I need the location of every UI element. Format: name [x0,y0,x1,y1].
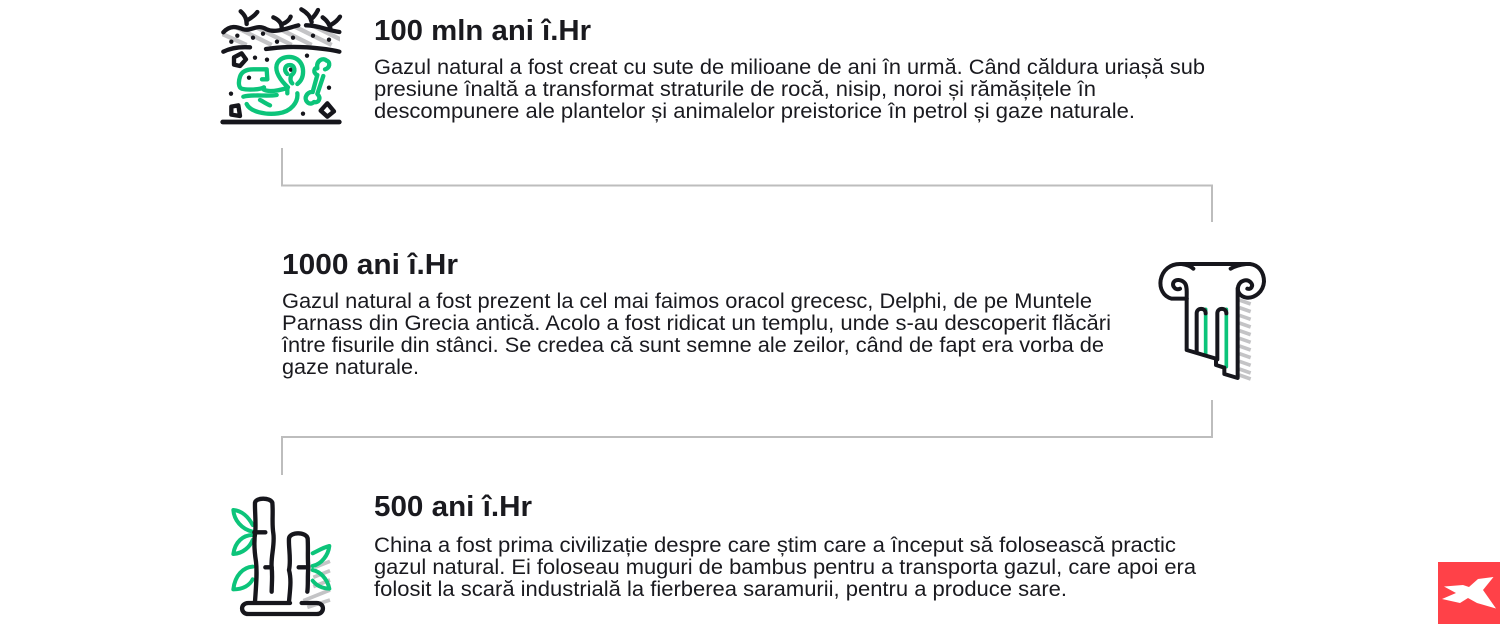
connector: step 2 to step 3 [282,400,1212,475]
text block: step 3 description: folosit la scară industrială la fierberea saramurii, pentru a produce sare. [374,578,1067,601]
text block: step 2 description: Gazul natural a fost prezent la cel mai faimos oracol grecesc, Delphi, de pe Muntele [282,290,1092,313]
icon: fossils in soil layers [220,7,342,124]
text block: step 3 description [374,534,1196,601]
icon: bamboo [233,499,330,614]
icon: Greek column [1160,264,1264,379]
text block: step 1 description [374,56,1205,123]
heading: 100 mln ani î.Hr: 100 mln ani î.Hr [374,15,591,47]
text block: step 3 description: gazul natural. Ei foloseau muguri de bambus pentru a transporta gazul, care apoi era [374,556,1196,579]
text block: step 2 description: între fisurile din stânci. Se credea că sunt semne ale zeilor, când de fapt era vorba de [281,334,1104,357]
text block: step 2 description [281,290,1111,379]
text block: step 1 description: descompunere ale plantelor și animalelor preistorice în petrol și gaze naturale. [374,100,1135,123]
text block: step 3 description: China a fost prima civilizație despre care știm care a început să folosească practic [374,534,1176,557]
logo: red square with white X [1438,562,1500,624]
heading: 500 ani î.Hr: 500 ani î.Hr [374,491,532,523]
text block: step 1 description: Gazul natural a fost creat cu sute de milioane de ani în urmă. Când căldura uriașă sub [374,56,1205,79]
connector: step 1 to step 2 [282,148,1212,222]
text block: step 2 description: gaze naturale. [282,356,419,379]
text block: step 1 description: presiune înaltă a transformat straturile de rocă, nisip, noroi și rămășițele în [374,78,1096,101]
text block: step 2 description: Parnass din Grecia antică. Acolo a fost ridicat un templu, unde s-au descoperit flăcări [282,312,1111,335]
heading: 1000 ani î.Hr: 1000 ani î.Hr [282,249,458,281]
